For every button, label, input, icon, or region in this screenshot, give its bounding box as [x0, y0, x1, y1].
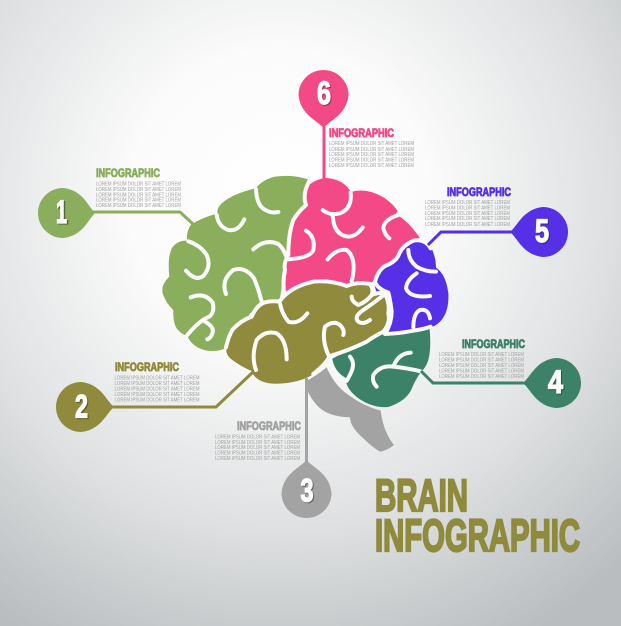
text block 3: LOREM IPSUM DOLOR SIT AMET LOREM: [215, 434, 300, 440]
pin 3: [282, 460, 332, 518]
number 5 shadow: 5: [536, 214, 550, 250]
pin 1: [38, 188, 95, 238]
number 2 shadow: 2: [76, 390, 89, 426]
item 3 gray: [215, 378, 332, 518]
green lobe: [162, 176, 310, 351]
text block 4: [439, 352, 524, 380]
item 5 purple: [425, 187, 568, 257]
text block 5: LOREM IPSUM DOLOR SIT AMET LOREM: [425, 200, 510, 206]
text block 6: LOREM IPSUM DOLOR SIT AMET LOREM: [329, 141, 414, 147]
text block 3: LOREM IPSUM DOLOR SIT AMET LOREM: [215, 450, 300, 456]
lobe boundaries: [226, 179, 431, 381]
text block 6: LOREM IPSUM DOLOR SIT AMET LOREM: [329, 152, 414, 158]
title: [375, 470, 580, 561]
text block 6: LOREM IPSUM DOLOR SIT AMET LOREM: [329, 163, 414, 169]
text block 6: [329, 141, 414, 169]
text block 2: LOREM IPSUM DOLOR SIT AMET LOREM: [114, 386, 200, 392]
number 3 shadow: 3: [302, 474, 314, 510]
number 4: 4: [548, 364, 563, 400]
green lobe folds: [186, 189, 286, 339]
text block 2: LOREM IPSUM DOLOR SIT AMET LOREM: [114, 398, 200, 404]
connector 1: [90, 212, 193, 224]
pin 2: [56, 382, 114, 432]
text block 3: LOREM IPSUM DOLOR SIT AMET LOREM: [215, 445, 300, 451]
text block 5: [425, 200, 510, 228]
purple lobe: [373, 239, 448, 335]
text block 3: LOREM IPSUM DOLOR SIT AMET LOREM: [215, 456, 300, 462]
text block 1: LOREM IPSUM DOLOR SIT AMET LOREM: [96, 192, 181, 198]
text block 6: LOREM IPSUM DOLOR SIT AMET LOREM: [329, 147, 414, 153]
teal lobe: [330, 327, 430, 407]
text block 1: LOREM IPSUM DOLOR SIT AMET LOREM: [96, 182, 181, 188]
olive lobe: [226, 281, 390, 384]
heading 2: INFOGRAPHIC: [115, 362, 179, 374]
text block 4: LOREM IPSUM DOLOR SIT AMET LOREM: [439, 368, 524, 374]
number 4 shadow: 4: [549, 365, 564, 401]
connector 3: [305, 378, 308, 466]
connector 4: [421, 371, 530, 383]
pin 6: [298, 70, 348, 128]
teal lobe folds: [347, 353, 421, 387]
item 1 green: [38, 168, 193, 238]
text block 4: LOREM IPSUM DOLOR SIT AMET LOREM: [439, 358, 524, 364]
brain illustration: [162, 176, 448, 452]
number 5: 5: [535, 213, 549, 249]
heading 1: INFOGRAPHIC: [96, 168, 160, 180]
purple lobe folds: [406, 250, 436, 327]
text block 6: LOREM IPSUM DOLOR SIT AMET LOREM: [329, 158, 414, 164]
olive lobe folds: [254, 294, 385, 370]
text block 2: [114, 376, 200, 404]
number 1 shadow: 1: [58, 195, 68, 231]
text block 3: LOREM IPSUM DOLOR SIT AMET LOREM: [215, 440, 300, 446]
pink lobe folds: [287, 193, 398, 282]
text block 1: LOREM IPSUM DOLOR SIT AMET LOREM: [96, 198, 181, 204]
item 2 olive: [56, 362, 253, 432]
connector 2: [108, 372, 253, 407]
text block 1: LOREM IPSUM DOLOR SIT AMET LOREM: [96, 203, 181, 209]
text block 1: LOREM IPSUM DOLOR SIT AMET LOREM: [96, 187, 181, 193]
cerebellum gray lobe: [305, 367, 394, 452]
connector 5: [428, 232, 516, 245]
item 6 pink: [298, 70, 414, 182]
item 4 teal: [421, 339, 581, 408]
text block 3: [215, 434, 300, 462]
text block 5: LOREM IPSUM DOLOR SIT AMET LOREM: [425, 206, 510, 212]
number 6: 6: [317, 75, 331, 111]
number 2: 2: [75, 388, 88, 424]
text block 2: LOREM IPSUM DOLOR SIT AMET LOREM: [114, 392, 200, 398]
text block 1: [96, 182, 181, 209]
text block 2: LOREM IPSUM DOLOR SIT AMET LOREM: [114, 381, 200, 387]
heading 5: INFOGRAPHIC: [447, 187, 511, 199]
text block 2: LOREM IPSUM DOLOR SIT AMET LOREM: [114, 376, 200, 382]
number 3: 3: [300, 472, 314, 508]
heading 4: INFOGRAPHIC: [462, 339, 525, 351]
text block 5: LOREM IPSUM DOLOR SIT AMET LOREM: [425, 211, 510, 217]
text block 5: LOREM IPSUM DOLOR SIT AMET LOREM: [425, 222, 510, 228]
pin 5: [510, 207, 568, 257]
pink lobe: [283, 178, 422, 292]
number 6 shadow: 6: [318, 76, 332, 112]
heading 3: INFOGRAPHIC: [237, 421, 301, 433]
text block 4: LOREM IPSUM DOLOR SIT AMET LOREM: [439, 352, 524, 358]
heading 6: INFOGRAPHIC: [329, 128, 394, 140]
title: BRAIN: [375, 470, 468, 521]
text block 4: LOREM IPSUM DOLOR SIT AMET LOREM: [439, 363, 524, 369]
text block 5: LOREM IPSUM DOLOR SIT AMET LOREM: [425, 216, 510, 222]
connector 6: [322, 120, 326, 182]
pin 4: [523, 358, 581, 408]
number 1: 1: [56, 194, 67, 230]
text block 4: LOREM IPSUM DOLOR SIT AMET LOREM: [439, 374, 524, 380]
